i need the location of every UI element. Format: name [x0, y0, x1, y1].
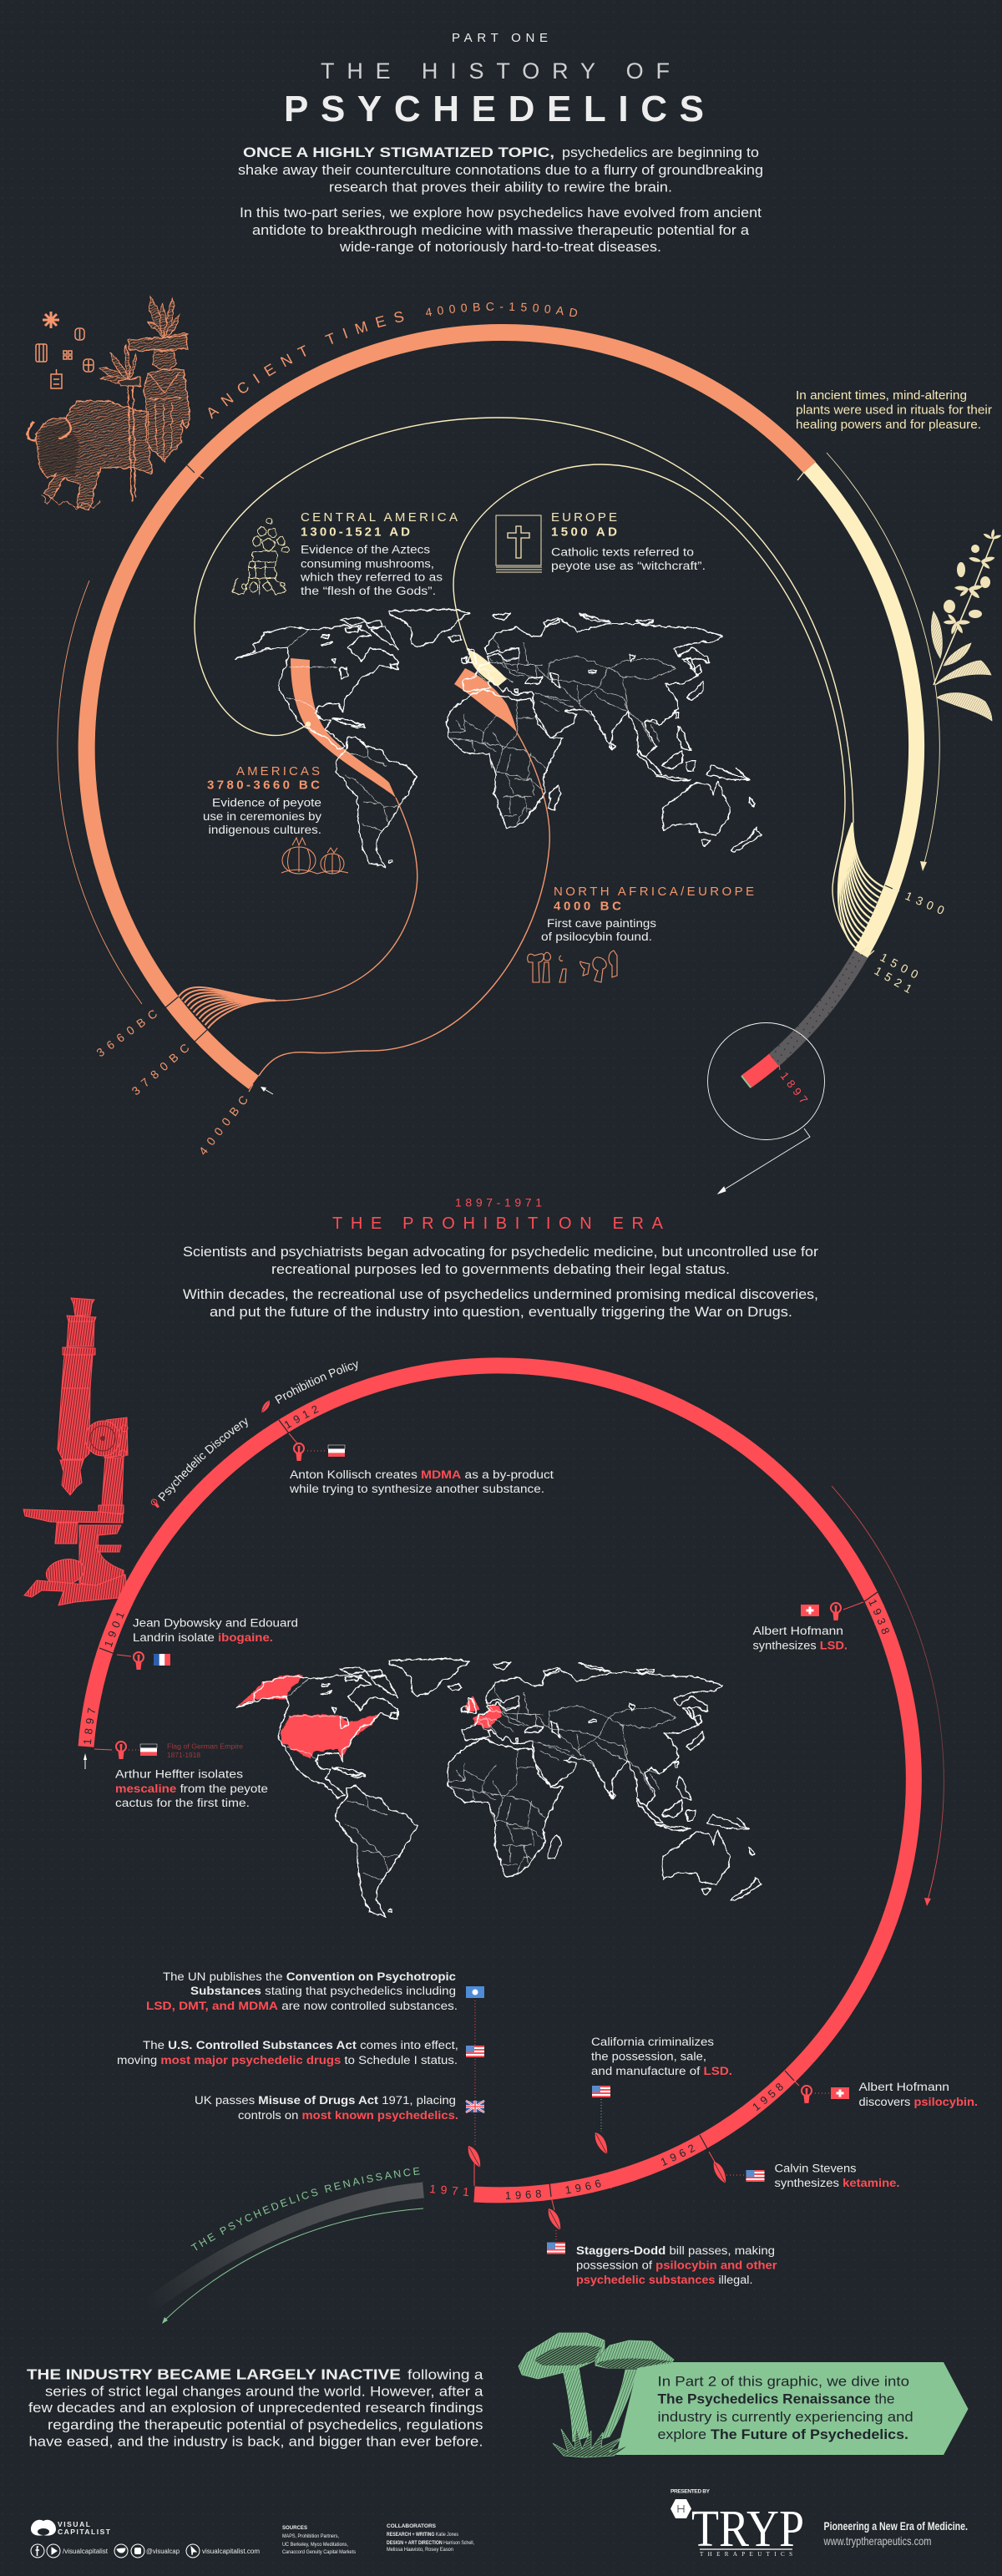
footer: Visual Capitalist — [31, 2520, 260, 2558]
tick marks — [164, 462, 899, 1092]
event: 1897 mescaline: Flag of German Empire — [167, 1742, 243, 1751]
event: 1897 mescaline — [115, 1742, 268, 1809]
conclusion text: following a — [407, 2367, 483, 2382]
callout: North Africa / Europe: NORTH AFRICA/EUROPE — [554, 885, 754, 899]
event: 1971 policies: The UN publishes the Convention on Psychotropic — [163, 1970, 457, 1983]
callout: Americas: use in ceremonies by — [203, 810, 321, 823]
event: 1968 Staggers-Dodd — [547, 2208, 777, 2286]
banner: part 2: In Part 2 of this graphic, we dive into — [658, 2375, 909, 2390]
note: mind-altering plants: plants were used in rituals for their — [796, 404, 992, 418]
event: 1897 mescaline: mescaline from the peyote — [115, 1782, 268, 1795]
year labels: ancient ring: 1521 — [872, 964, 918, 998]
callout: North Africa / Europe — [541, 885, 754, 943]
map wedge: north Africa and Europe — [454, 668, 517, 733]
ring chart: ancient times — [58, 332, 939, 1092]
footer: sources — [282, 2525, 357, 2555]
banner: part 2: industry is currently experiencing and — [658, 2410, 913, 2425]
prohibition intro text: Within decades, the recreational use of psychedelics undermined promising medical discoveries, — [183, 1287, 818, 1302]
year labels: ancient ring: 1300 — [903, 889, 951, 919]
tick marks — [78, 1420, 878, 2197]
callout: Central America: 1300-1521 AD — [301, 525, 410, 540]
footer: sources: UC Berkeley, Myco Meditations, — [282, 2542, 348, 2548]
footer: sources: MAPS, Prohibition Partners, — [282, 2533, 339, 2539]
shaman staff — [128, 384, 135, 501]
footer: collaborators — [387, 2523, 474, 2553]
footer: Visual Capitalist: visualcapitalist.com — [202, 2548, 260, 2555]
event: 1938 LSD: synthesizes LSD. — [753, 1639, 848, 1652]
event: 1968 Staggers-Dodd: Staggers-Dodd bill passes, making — [576, 2244, 775, 2257]
arrow: start marker — [84, 1753, 87, 1769]
section heading: prohibition era: 1897-1971 — [455, 1196, 542, 1209]
event: 1971 policies: The U.S. Controlled Substances Act comes into effect, — [143, 2039, 458, 2051]
connector curves — [179, 418, 883, 1076]
world map: prohibition — [236, 1658, 762, 1916]
year labels: ancient ring: 1500 — [878, 951, 925, 984]
event: 1897 mescaline: Arthur Heffter isolates — [115, 1767, 243, 1781]
footer: collaborators: COLLABORATORS — [387, 2523, 437, 2529]
event: 1958 psilocybin — [802, 2081, 978, 2108]
map wedge: Europe — [468, 649, 507, 687]
callout: Europe: peyote use as “witchcraft”. — [551, 560, 706, 572]
social icons — [31, 2544, 200, 2558]
section heading: prohibition era — [332, 1196, 664, 1233]
flower whorls — [944, 529, 1002, 635]
renaissance fade arc — [147, 2190, 423, 2324]
event: 1901 ibogaine: Landrin isolate ibogaine. — [133, 1631, 273, 1644]
icon: Aztec figure — [232, 518, 289, 595]
arc: red start of prohibition — [746, 1060, 774, 1082]
bison body — [36, 401, 152, 510]
icon: book with cross — [496, 515, 542, 572]
conclusion text: series of strict legal changes around the world. However, after a — [45, 2384, 483, 2400]
banner: part 2: The Psychedelics Renaissance the — [658, 2392, 895, 2407]
event: 1938 LSD: Albert Hofmann — [753, 1625, 843, 1637]
event: 1901 ibogaine: Jean Dybowsky and Edouard — [133, 1617, 298, 1629]
ring chart: prohibition — [78, 1366, 944, 2210]
event: 1971 policies: LSD, DMT, and MDMA are now controlled substances. — [146, 2000, 458, 2012]
note: mind-altering plants — [796, 389, 992, 432]
event: 1912 MDMA — [289, 1443, 554, 1495]
callout: Americas: 3780-3660 BC — [207, 778, 320, 792]
intro text: shake away their counterculture connotations due to a flurry of groundbreaking — [238, 163, 763, 178]
footer: sources: Canaccord Genuity Capital Markets — [282, 2549, 357, 2555]
footer: collaborators: DESIGN + ART DIRECTION Harrison Schell, — [387, 2540, 474, 2546]
note: mind-altering plants: healing powers and for pleasure. — [796, 418, 981, 432]
conclusion text — [27, 2366, 483, 2450]
intro text: wide-range of notoriously hard-to-treat diseases. — [339, 240, 661, 255]
intro text: research that proves their ability to rewire the brain. — [329, 180, 672, 195]
event: 1966 California: and manufacture of LSD. — [591, 2065, 732, 2077]
legend icon: bulb — [150, 1498, 160, 1509]
presenter: Tryp Therapeutics: PRESENTED BY — [671, 2489, 711, 2495]
intro text: ONCE A HIGHLY STIGMATIZED TOPIC, — [243, 145, 554, 160]
note: mind-altering plants: In ancient times, mind-altering — [796, 389, 967, 403]
shaman body — [144, 369, 190, 462]
prohibition intro text: and put the future of the industry into question, eventually triggering the War on Drugs. — [210, 1305, 792, 1320]
callout: North Africa / Europe: First cave paintings — [547, 917, 656, 930]
year labels on prohibition ring — [84, 1405, 889, 2199]
prohibition intro text: Scientists and psychiatrists began advocating for psychedelic medicine, but uncontrolled use for — [183, 1245, 819, 1260]
plant illustration — [931, 529, 1002, 721]
curve: Americas — [276, 798, 418, 1001]
arc: grey gap segment — [774, 954, 861, 1060]
curve: North Africa — [259, 733, 549, 1076]
callout: Europe: 1500 AD — [551, 525, 617, 540]
footer: sources: SOURCES — [282, 2525, 308, 2531]
year labels: ancient ring: 3660BC — [94, 1003, 164, 1059]
callout: Europe — [551, 510, 706, 572]
event: 1966 California: the possession, sale, — [591, 2050, 706, 2063]
event: 1971 policies: controls on most known psychedelics. — [238, 2109, 458, 2122]
callout: Central America: consuming mushrooms, — [301, 558, 434, 570]
callout: Americas: indigenous cultures. — [209, 824, 321, 836]
banner: part 2 — [616, 2362, 969, 2455]
event: 1912 MDMA: Anton Kollisch creates MDMA as a by-product — [290, 1468, 554, 1481]
shaman bar and head — [128, 336, 188, 351]
shaman feathers — [148, 297, 188, 339]
label: the psychedelics renaissance: THE PSYCHEDELICS RENAISSANCE — [190, 2167, 420, 2250]
label: 1971: 1971 — [429, 2182, 474, 2199]
year labels: ancient ring — [94, 889, 951, 1158]
event: 1962 ketamine: synthesizes ketamine. — [775, 2177, 900, 2189]
event: 1971 policies: UK passes Misuse of Drugs Act 1971, placing — [195, 2094, 456, 2107]
conclusion text: few decades and an explosion of unprecedented research findings — [28, 2400, 483, 2416]
presenter: Tryp Therapeutics: THERAPEUTICS — [700, 2551, 792, 2558]
world map: ancient times — [236, 609, 762, 867]
section heading: prohibition era: THE PROHIBITION ERA — [332, 1214, 664, 1233]
prohibition intro text: recreational purposes led to governments debating their legal status. — [271, 1262, 730, 1277]
footer: Visual Capitalist: CAPITALIST — [58, 2528, 111, 2536]
icon: tribal symbols — [36, 312, 94, 388]
event: 1971 policies: moving most major psychedelic drugs to Schedule I status. — [117, 2054, 458, 2066]
thin outer arcs with arrows — [58, 453, 939, 1004]
presenter: Tryp Therapeutics: TRYP — [691, 2501, 804, 2558]
event: 1958 psilocybin: discovers psilocybin. — [858, 2096, 978, 2108]
callout: Central America: the “flesh of the Gods”. — [301, 585, 436, 597]
icon: peyote cacti — [281, 838, 348, 874]
callout: Central America: Evidence of the Aztecs — [301, 543, 430, 556]
year labels: ancient ring: 4000BC — [196, 1088, 254, 1158]
event: 1971 policies: Substances stating that psychedelics including — [190, 1985, 456, 1997]
legend along ring: Prohibition Policy — [275, 1362, 357, 1404]
event: 1901 ibogaine — [133, 1617, 298, 1670]
arrow: small pointer near 4000 BC — [261, 1087, 273, 1094]
arc: peach ancient times — [87, 332, 809, 1083]
marker: Mexico dot — [306, 722, 311, 727]
zoom circle and arrow to next section — [708, 1022, 825, 1194]
year labels on prohibition ring: 1901 — [105, 1613, 124, 1647]
year labels on prohibition ring: 1938 — [868, 1600, 889, 1634]
event: 1938 LSD — [753, 1603, 848, 1652]
legend icon: leaf — [258, 1400, 273, 1413]
intro text: In this two-part series, we explore how psychedelics have evolved from ancient — [240, 205, 762, 221]
title: THE HISTORY OF — [321, 58, 670, 84]
intro text — [238, 145, 763, 255]
footer: collaborators: Melissa Haavisto, Rosey Eason — [387, 2547, 453, 2553]
kicker: part one: PART ONE — [452, 31, 548, 45]
callout: North Africa / Europe: of psilocybin found. — [541, 931, 652, 943]
ring heading: ancient times: ANCIENT TIMES — [208, 312, 404, 419]
prohibition intro text — [183, 1245, 819, 1320]
callout: Americas: AMERICAS — [236, 764, 320, 778]
event: 1962 ketamine — [714, 2162, 900, 2189]
event: 1958 psilocybin: Albert Hofmann — [858, 2081, 949, 2093]
event: 1971 policies — [117, 1970, 484, 2168]
conclusion text: regarding the therapeutic potential of psychedelics, regulations — [48, 2417, 483, 2432]
callout: Central America: CENTRAL AMERICA — [301, 510, 458, 525]
year labels on prohibition ring: 1912 — [285, 1405, 319, 1428]
intro text: antidote to breakthrough medicine with massive therapeutic potential for a — [252, 223, 750, 238]
callout: Europe: Catholic texts referred to — [551, 546, 694, 558]
legend along ring — [150, 1362, 357, 1509]
event: 1962 ketamine: Calvin Stevens — [775, 2162, 857, 2175]
illustration: microscope — [23, 1298, 128, 1605]
event: 1897 mescaline: cactus for the first time. — [115, 1797, 250, 1809]
callout: Americas — [203, 764, 321, 836]
footer: Visual Capitalist: /visualcapitalist — [63, 2548, 109, 2555]
event: 1912 MDMA: while trying to synthesize another substance. — [289, 1483, 544, 1495]
icon: cave mushrooms — [528, 951, 617, 982]
map outlines — [236, 1658, 762, 1916]
illustration: bison and shaman — [27, 297, 190, 510]
callout: North Africa / Europe: 4000 BC — [554, 899, 621, 914]
callout: Central America — [300, 510, 458, 597]
conclusion text: THE INDUSTRY BECAME LARGELY INACTIVE — [27, 2366, 401, 2382]
year labels: ancient ring: 3780BC — [129, 1037, 196, 1098]
year labels on prohibition ring: 1968 — [506, 2190, 541, 2199]
callout: Europe: EUROPE — [551, 510, 617, 525]
presenter: Tryp Therapeutics — [671, 2489, 968, 2558]
event: 1897 mescaline: 1871-1918 — [167, 1751, 200, 1759]
title: PSYCHEDELICS — [284, 89, 704, 129]
footer: Visual Capitalist: @visualcap — [146, 2548, 180, 2555]
event: 1966 California: California criminalizes — [591, 2036, 714, 2048]
callout: Central America: which they referred to as — [300, 571, 443, 583]
intro text: psychedelics are beginning to — [562, 145, 759, 160]
illustration: mushrooms — [519, 2333, 674, 2457]
fan: peach lines — [179, 987, 276, 1028]
banner: part 2: explore The Future of Psychedelics. — [658, 2427, 908, 2442]
fan: cream lines — [838, 823, 883, 950]
conclusion text: have eased, and the industry is back, and bigger than ever before. — [28, 2434, 483, 2450]
year labels on prohibition ring: 1958 — [753, 2083, 783, 2112]
event: 1966 California — [591, 2036, 732, 2154]
arc: cream segment — [810, 468, 917, 954]
curve: Europe — [453, 464, 858, 950]
curve: Central America — [195, 418, 853, 823]
grass — [553, 2426, 628, 2457]
logo: Visual Capitalist — [31, 2520, 56, 2536]
footer: Visual Capitalist: VISUAL — [58, 2520, 90, 2528]
map wedge: Americas — [291, 658, 396, 798]
map fills: prohibition countries — [238, 1675, 501, 1761]
event: 1968 Staggers-Dodd: possession of psilocybin and other — [576, 2259, 777, 2272]
presenter: Tryp Therapeutics: www.tryptherapeutics.com — [823, 2534, 932, 2548]
callout: Americas: Evidence of peyote — [212, 797, 321, 809]
legend along ring: Psychedelic Discovery — [158, 1417, 248, 1502]
map outlines — [236, 609, 762, 867]
event: 1968 Staggers-Dodd: psychedelic substances illegal. — [576, 2274, 753, 2286]
title — [284, 58, 704, 129]
year labels on prohibition ring: 1966 — [566, 2180, 601, 2193]
footer: collaborators: RESEARCH + WRITING Katie Jones — [387, 2532, 459, 2538]
logo hexagon — [671, 2499, 691, 2518]
year labels on prohibition ring: 1962 — [661, 2145, 696, 2166]
year labels: ancient ring: 1897 — [778, 1070, 812, 1109]
year labels on prohibition ring: 1897 — [84, 1707, 95, 1744]
ring heading: ancient times — [208, 302, 578, 419]
ring heading: ancient times: 4000BC-1500AD — [426, 302, 578, 317]
